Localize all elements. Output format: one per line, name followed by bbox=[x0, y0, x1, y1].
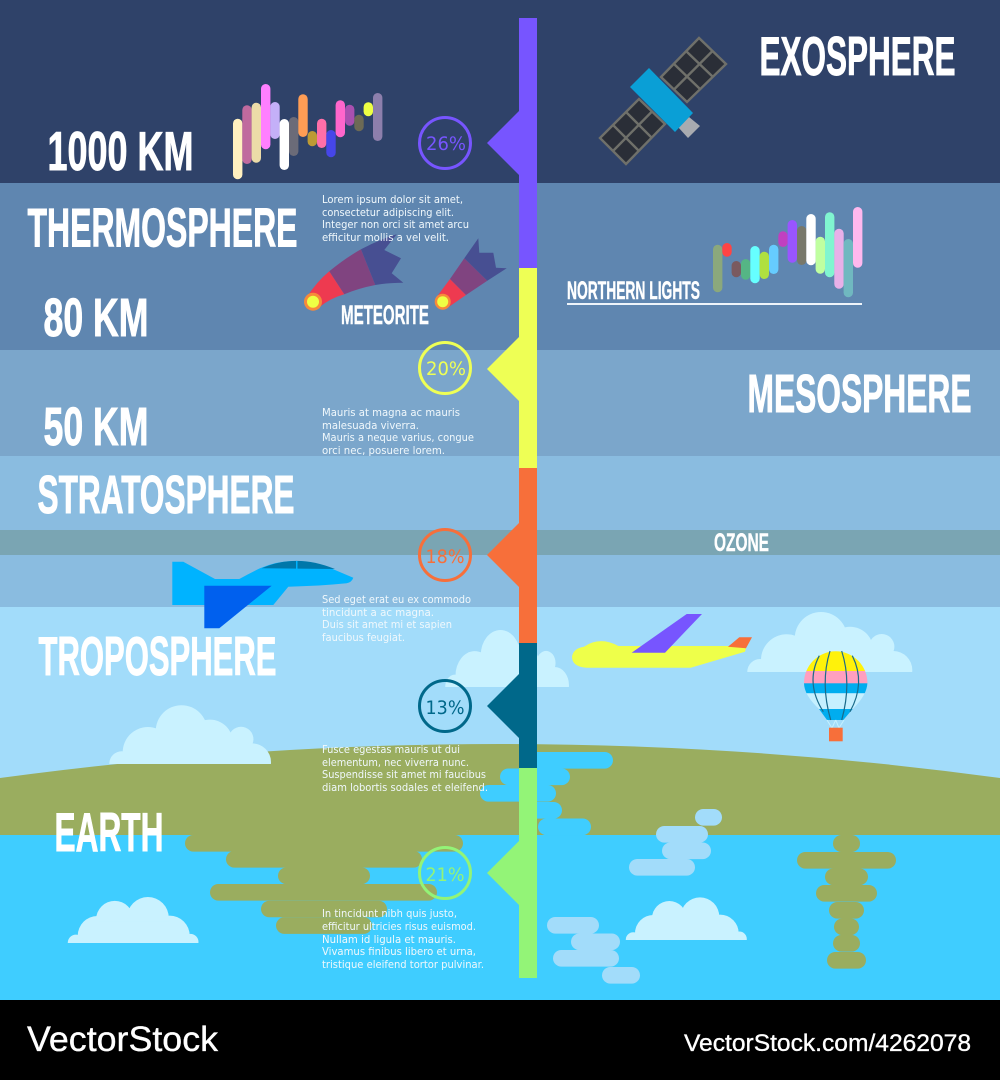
satellite nozzle bbox=[678, 117, 700, 138]
text block 4 bbox=[322, 745, 488, 794]
text block 2 bbox=[322, 408, 474, 457]
text block 4: diam lobortis sodales et eleifend. bbox=[322, 783, 488, 794]
text block 1: Integer non orci sit amet arcu bbox=[322, 220, 469, 231]
segment and pointer: 18% bbox=[487, 468, 537, 643]
percent badge 20%: 20% bbox=[426, 359, 466, 380]
icon: meteorite large bbox=[304, 234, 403, 311]
icon: fighter jet bbox=[172, 561, 353, 628]
text block 5: Vivamus finibus libero et urna, bbox=[322, 947, 476, 958]
cloud: ocean right bbox=[626, 897, 747, 940]
percent badge 13% bbox=[420, 680, 470, 732]
satellite lower solar panel bbox=[600, 99, 665, 164]
percent badge 26%: 26% bbox=[426, 134, 466, 155]
panel: thermosphere band bbox=[0, 183, 1000, 350]
label: 80 km: 80 KM bbox=[44, 288, 148, 348]
percent badge 18%: 18% bbox=[426, 547, 464, 568]
panel: mesosphere band bbox=[0, 350, 1000, 456]
northern lights underline bbox=[567, 303, 862, 305]
icon: aurora bars exosphere bbox=[233, 84, 382, 179]
text block 2: malesuada viverra. bbox=[322, 421, 419, 432]
segment and pointer: exosphere 26% bbox=[487, 18, 537, 268]
footer image id: VectorStock.com/4262078 bbox=[684, 1030, 971, 1057]
percent badge 13%: 13% bbox=[426, 698, 464, 719]
label: northern lights: NORTHERN LIGHTS bbox=[567, 277, 700, 305]
text block 4: Suspendisse sit amet mi faucibus bbox=[322, 770, 486, 781]
text block 5: In tincidunt nibh quis justo, bbox=[322, 909, 457, 920]
text block 3: tincidunt a ac magna. bbox=[322, 608, 434, 619]
label: meteorite: METEORITE bbox=[341, 300, 429, 330]
panel: ozone band bbox=[0, 530, 1000, 555]
label: 1000 km: 1000 KM bbox=[48, 120, 194, 182]
text block 2: Mauris at magna ac mauris bbox=[322, 408, 460, 419]
heading: earth: EARTH bbox=[54, 801, 164, 863]
percent badge 21% bbox=[420, 848, 470, 898]
text block 5: Nullam id ligula et mauris. bbox=[322, 935, 456, 946]
icon: hot air balloon bbox=[804, 650, 868, 742]
text block 5: tristique eleifend tortor pulvinar. bbox=[322, 960, 484, 971]
text block 1 bbox=[322, 195, 469, 244]
cloud: sky centre bbox=[445, 630, 569, 687]
text block 4: elementum, nec viverra nunc. bbox=[322, 758, 469, 769]
text block 1: consectetur adipiscing elit. bbox=[322, 208, 454, 219]
satellite body bbox=[630, 68, 693, 132]
vertical timeline bar bbox=[487, 18, 537, 978]
text block 3: faucibus feugiat. bbox=[322, 633, 405, 644]
label: 50 km: 50 KM bbox=[44, 397, 148, 457]
cloud: sky right bbox=[747, 612, 912, 672]
icon: passenger plane bbox=[572, 614, 752, 668]
icon: meteorite small bbox=[435, 238, 507, 310]
text block 5 bbox=[322, 909, 484, 971]
footer bar bbox=[0, 1000, 1000, 1080]
pale blue shoals upper bbox=[629, 809, 722, 876]
panel: ocean bbox=[0, 835, 1000, 1000]
segment and pointer: 13% bbox=[487, 643, 537, 768]
segment and pointer: 20% bbox=[487, 268, 537, 468]
cloud: ocean left bbox=[68, 897, 198, 943]
island stack bbox=[797, 835, 896, 969]
heading: thermosphere: THERMOSPHERE bbox=[28, 196, 298, 258]
icon: aurora bars northern lights bbox=[713, 207, 862, 297]
text block 1: Lorem ipsum dolor sit amet, bbox=[322, 195, 463, 206]
text block 5: efficitur ultricies risus euismod. bbox=[322, 922, 476, 933]
text block 3 bbox=[322, 595, 471, 644]
panel: earth land hill bbox=[0, 744, 1000, 840]
land mass in ocean bbox=[185, 835, 463, 934]
percent badge 26% bbox=[420, 118, 470, 168]
text block 1: efficitur mollis a vel velit. bbox=[322, 233, 449, 244]
water inlets on land bbox=[480, 752, 613, 835]
percent badge 21%: 21% bbox=[426, 865, 464, 886]
satellite upper solar panel bbox=[661, 38, 726, 102]
icon: satellite bbox=[600, 38, 726, 164]
pale blue shoals lower bbox=[547, 917, 640, 984]
label: ozone: OZONE bbox=[714, 529, 769, 557]
percent badge 18% bbox=[420, 530, 470, 580]
panel: stratosphere band bbox=[0, 456, 1000, 608]
panel: exosphere band bbox=[0, 0, 1000, 183]
text block 2: orci nec, posuere lorem. bbox=[322, 446, 445, 457]
text block 2: Mauris a neque varius, congue bbox=[322, 433, 474, 444]
text block 3: Sed eget erat eu ex commodo bbox=[322, 595, 471, 606]
footer brand: VectorStock bbox=[27, 1020, 219, 1059]
heading: stratosphere: STRATOSPHERE bbox=[38, 465, 294, 525]
cloud: hill left bbox=[109, 705, 271, 764]
heading: troposphere: TROPOSPHERE bbox=[38, 625, 276, 687]
segment and pointer: 21% bbox=[487, 768, 537, 978]
text block 3: Duis sit amet mi et sapien bbox=[322, 620, 452, 631]
text block 4: Fusce egestas mauris ut dui bbox=[322, 745, 460, 756]
percent badge 20% bbox=[420, 342, 470, 394]
panel: troposphere band bbox=[0, 607, 1000, 847]
